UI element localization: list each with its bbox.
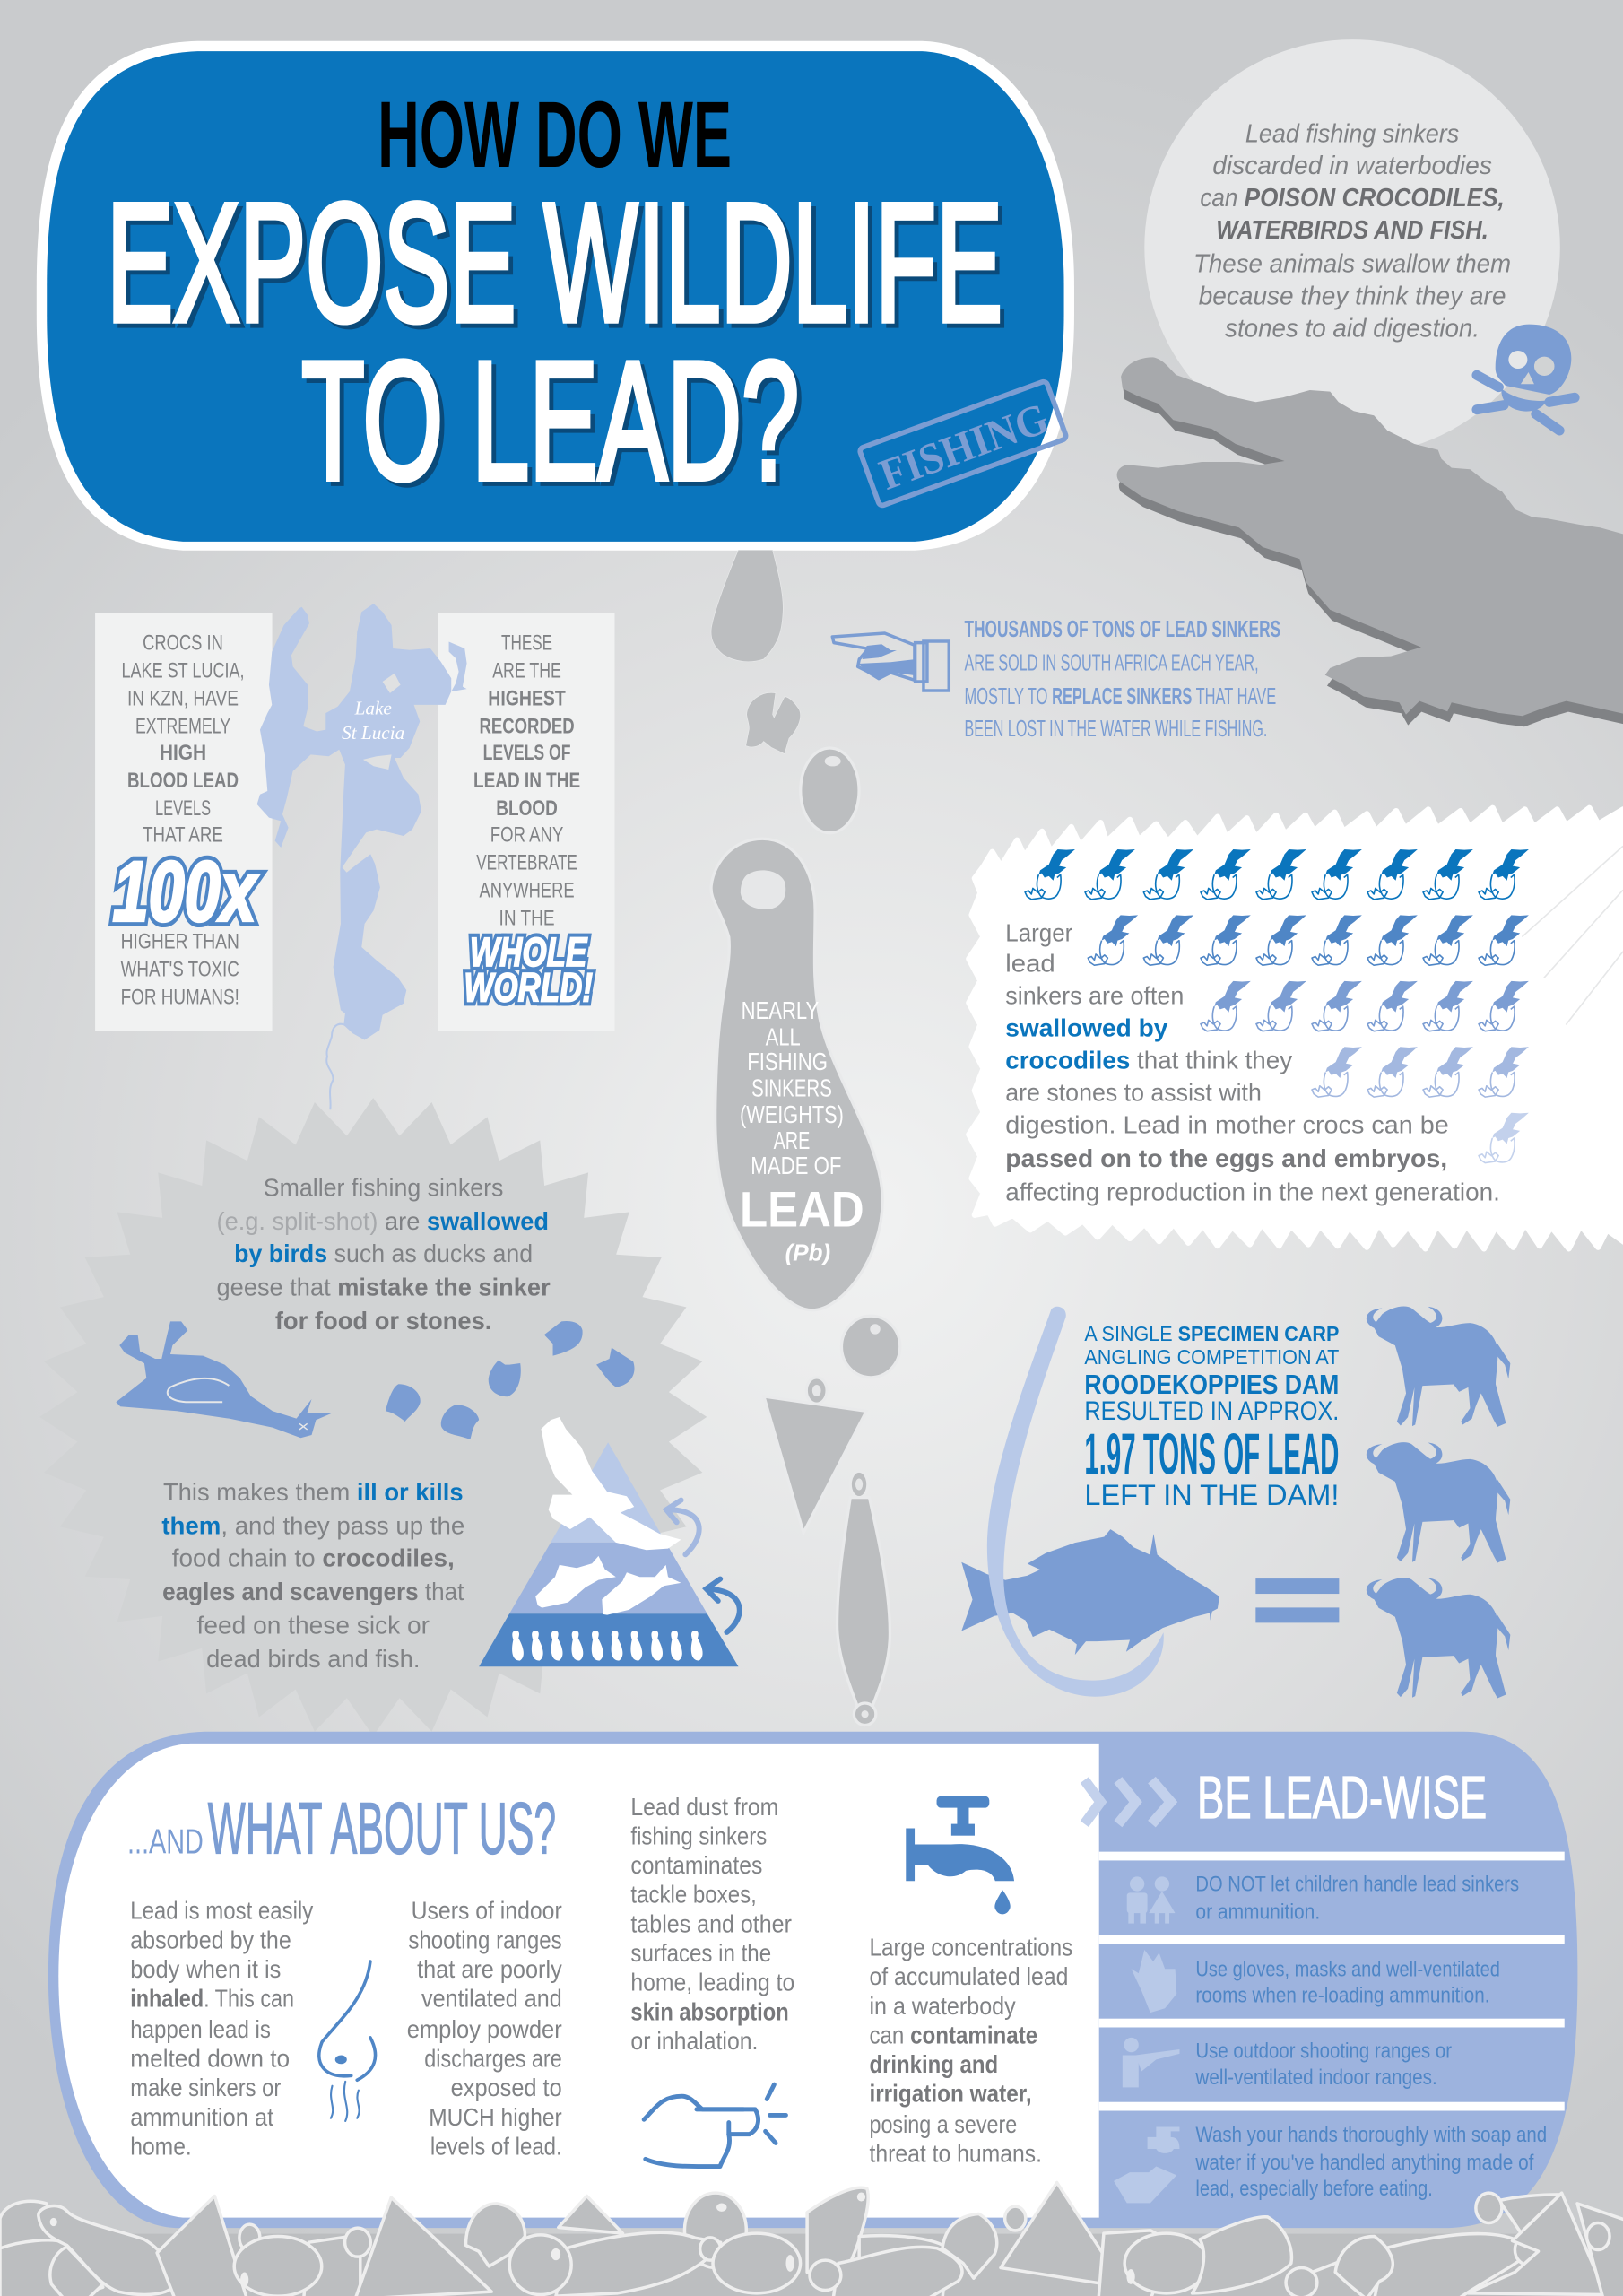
text: ill or kills: eagles and scavengers that — [162, 1578, 464, 1605]
intro text: These animals swallow them — [1193, 250, 1511, 279]
tip: gloves — [1132, 1950, 1500, 2013]
icon: dead duck — [116, 1321, 331, 1438]
sinker label: ALL — [766, 1022, 801, 1050]
text: smaller sinkers — [217, 1173, 551, 1335]
panel: highest recorded — [438, 613, 614, 1031]
text: thousands of tons: THOUSANDS OF TONS OF LEAD SINKERS — [965, 615, 1280, 642]
sinker label — [740, 996, 864, 1265]
crocodile text: are stones to assist with — [1005, 1078, 1262, 1106]
text: smaller sinkers: Smaller fishing sinkers — [264, 1173, 503, 1201]
sinker: ball — [841, 1316, 900, 1378]
text lines right: ARE THE — [492, 660, 561, 683]
100x: 100x — [113, 845, 258, 940]
white area — [58, 1744, 1099, 2218]
column: shooting ranges: shooting ranges — [408, 1926, 562, 1953]
icon: children — [1127, 1876, 1176, 1924]
icon: pointing hand — [832, 633, 949, 691]
column: inhaled: body when it is — [130, 1955, 281, 1983]
panel: crocs blood lead — [95, 613, 273, 1031]
column: inhaled: make sinkers or — [130, 2074, 281, 2101]
whole world — [464, 929, 593, 1010]
text lines left: FOR HUMANS! — [121, 987, 239, 1010]
column: water: drinking and — [869, 2050, 998, 2078]
intro text: WATERBIRDS AND FISH. — [1216, 216, 1488, 245]
crocodile text: crocodiles that think they — [1005, 1046, 1292, 1074]
column: lead dust: surfaces in the — [630, 1939, 771, 1967]
text: ill or kills: This makes them ill or kills — [163, 1478, 464, 1506]
panel: starburst birds — [39, 1098, 707, 1736]
intro text — [1193, 119, 1511, 343]
column: water: Large concentrations — [869, 1934, 1072, 1961]
heading: to lead: TO LEAD? — [306, 331, 803, 519]
text: smaller sinkers: for food or stones. — [275, 1307, 491, 1335]
sinker: long — [838, 1471, 890, 1725]
heading: to lead: TO LEAD? — [301, 326, 799, 515]
whole world: WORLD! — [464, 964, 593, 1010]
whole world: WORLD! — [464, 964, 593, 1010]
intro text: discarded in waterbodies — [1212, 152, 1492, 180]
text lines right: THESE — [501, 632, 552, 656]
panel: and what about us — [48, 1732, 1577, 2228]
crocodile text: affecting reproduction in the next generation. — [1005, 1178, 1500, 1205]
column: shooting ranges — [407, 1897, 562, 2160]
column: lead dust: skin absorption — [630, 1997, 789, 2025]
sinker: oval — [801, 748, 859, 833]
tip: outdoor: Use outdoor shooting ranges or — [1195, 2040, 1452, 2064]
icon: skull and crossbones — [1477, 325, 1575, 430]
text lines left: HIGH — [160, 742, 206, 765]
100x: 100x — [113, 845, 258, 940]
column: water: threat to humans. — [869, 2140, 1042, 2168]
text lines right: BLOOD — [496, 797, 558, 821]
pile base — [0, 2234, 1623, 2296]
carp text: A SINGLE SPECIMEN CARP — [1084, 1322, 1339, 1345]
column: inhaled: melted down to — [130, 2045, 290, 2073]
tip: gloves: Use gloves, masks and well-ventilated — [1195, 1958, 1500, 1981]
text lines right — [473, 632, 580, 931]
text lines right: LEAD IN THE — [473, 770, 580, 793]
column: shooting ranges: Users of indoor — [412, 1897, 562, 1925]
column: inhaled: absorbed by the — [130, 1926, 291, 1953]
text lines left: LEVELS — [155, 797, 211, 821]
column: inhaled — [130, 1897, 313, 2160]
column: lead dust: home, leading to — [630, 1969, 794, 1996]
column: lead dust: fishing sinkers — [630, 1822, 767, 1849]
sinker label: ARE — [774, 1126, 810, 1154]
heading: expose wildlife — [107, 168, 1007, 361]
text lines right: LEVELS OF — [483, 742, 571, 765]
sinker: split shot — [746, 692, 801, 754]
text lines left: THAT ARE — [143, 823, 223, 847]
buffalo — [1367, 1306, 1510, 1698]
column: inhaled: ammunition at — [130, 2103, 273, 2131]
sinker label: SINKERS — [751, 1074, 832, 1101]
column: lead dust: Lead dust from — [630, 1793, 778, 1821]
crocodile text: sinkers are often — [1005, 982, 1184, 1010]
column: shooting ranges: exposed to — [451, 2074, 562, 2101]
food chain pyramid — [479, 1417, 740, 1666]
sinker label: (WEIGHTS) — [740, 1100, 844, 1128]
tip: wash: lead, especially before eating. — [1195, 2178, 1433, 2201]
tip: children — [1127, 1874, 1519, 1925]
column: water — [869, 1934, 1072, 2168]
icon: tap and hand — [1114, 2126, 1179, 2203]
tip: wash: water if you've handled anything made of — [1195, 2152, 1534, 2175]
column: shooting ranges: ventilated and — [421, 1985, 562, 2013]
sinker label: MADE OF — [751, 1152, 841, 1179]
heading: expose wildlife: EXPOSE WILDLIFE — [111, 172, 1007, 361]
carp text: LEFT IN THE DAM! — [1084, 1478, 1339, 1511]
icon: tap — [906, 1796, 1014, 1914]
text lines left: EXTREMELY — [135, 716, 230, 739]
sinker label: LEAD — [740, 1182, 864, 1238]
text: ill or kills: dead birds and fish. — [206, 1645, 420, 1673]
icon: gloves — [1132, 1950, 1176, 2013]
column: lead dust: contaminates — [630, 1851, 762, 1879]
heading — [127, 1787, 556, 1869]
heading: ...AND — [127, 1822, 204, 1861]
carp text: ROODEKOPPIES DAM — [1084, 1369, 1339, 1400]
chevrons — [1084, 1780, 1171, 1824]
crocodile text: swallowed by — [1005, 1014, 1168, 1042]
sinker: triangle — [764, 1378, 866, 1533]
sinker label: (Pb) — [785, 1239, 830, 1265]
text lines right: IN THE — [499, 908, 555, 931]
icon: scattered sinkers — [386, 1321, 634, 1439]
text lines left: IN KZN, HAVE — [127, 688, 239, 711]
text lines right: RECORDED — [480, 716, 575, 739]
column: shooting ranges: levels of lead. — [430, 2132, 562, 2160]
text lines left: WHAT'S TOXIC — [121, 959, 239, 982]
column: water: irrigation water, — [869, 2080, 1032, 2108]
stamp: fishing: FISHING — [873, 393, 1055, 500]
carp text: RESULTED IN APPROX. — [1084, 1396, 1339, 1426]
arrows — [666, 1500, 740, 1632]
tip: gloves: rooms when re-loading ammunition. — [1195, 1985, 1489, 2008]
title panel shape — [37, 41, 1074, 551]
text lines left: HIGHER THAN — [121, 931, 239, 954]
fishing hook — [987, 1307, 1164, 1697]
lake label — [342, 697, 404, 744]
fish — [535, 1556, 681, 1615]
panel: carp competition — [961, 1306, 1510, 1698]
text lines right: ANYWHERE — [480, 880, 575, 903]
text lines left: CROCS IN — [143, 632, 223, 656]
text: ill or kills — [161, 1478, 464, 1673]
icon: shooter — [1123, 2038, 1179, 2087]
column: lead dust: or inhalation. — [630, 2027, 758, 2055]
column: shooting ranges: employ powder — [407, 2015, 562, 2043]
text: thousands of tons: MOSTLY TO REPLACE SINKERS THAT HAVE — [965, 683, 1276, 709]
whole world: WHOLE — [470, 929, 588, 975]
text: smaller sinkers: by birds such as ducks and — [234, 1239, 533, 1267]
column: inhaled: Lead is most easily — [130, 1897, 313, 1925]
crocodile text: digestion. Lead in mother crocs can be — [1005, 1110, 1449, 1138]
text: thousands of tons — [965, 615, 1280, 742]
panel: be lead-wise — [1084, 1764, 1565, 2203]
column: water: can contaminate — [869, 2021, 1037, 2048]
panel: title — [37, 41, 1074, 551]
carp text — [1084, 1322, 1339, 1511]
intro text: can POISON CROCODILES, — [1200, 184, 1505, 213]
icon: nose — [319, 1961, 376, 2121]
text lines right: VERTEBRATE — [476, 851, 577, 874]
text: smaller sinkers: geese that mistake the sinker — [217, 1273, 551, 1300]
crocodile text: lead — [1005, 950, 1055, 978]
heading: how do we: HOW DO WE — [378, 83, 732, 187]
column: water: of accumulated lead — [869, 1962, 1068, 1990]
text lines right: HIGHEST — [488, 688, 566, 711]
column: lead dust — [630, 1793, 794, 2055]
heading: WHAT ABOUT US? — [208, 1787, 556, 1869]
map: lake st lucia — [257, 604, 467, 1109]
tip: children: or ammunition. — [1195, 1901, 1320, 1925]
text: ill or kills: them, and they pass up the — [161, 1511, 464, 1539]
crocodile text: passed on to the eggs and embryos, — [1005, 1144, 1447, 1172]
icon: pointing finger — [644, 2084, 785, 2167]
lake label: Lake — [354, 697, 392, 718]
whole world: WHOLE — [470, 929, 588, 975]
sinker: drop — [711, 550, 783, 662]
tip: children: DO NOT let children handle lead sinkers — [1195, 1874, 1519, 1897]
column: inhaled: inhaled. This can — [130, 1985, 294, 2013]
text: thousands of tons: ARE SOLD IN SOUTH AFRICA EACH YEAR, — [965, 649, 1259, 676]
tip: outdoor — [1123, 2038, 1452, 2090]
carp text: ANGLING COMPETITION AT — [1084, 1345, 1339, 1369]
tip: wash: Wash your hands thoroughly with soap and — [1195, 2124, 1547, 2147]
text lines right: FOR ANY — [490, 823, 564, 847]
pile of sinkers — [0, 2183, 1623, 2296]
text: thousands of tons: BEEN LOST IN THE WATER WHILE FISHING. — [965, 715, 1267, 742]
text: ill or kills: feed on these sick or — [197, 1611, 430, 1639]
small sinkers row — [512, 1631, 703, 1661]
lake label: St Lucia — [342, 722, 404, 744]
column: shooting ranges: MUCH higher — [429, 2103, 562, 2131]
divider bars — [1099, 1852, 1565, 2111]
column: shooting ranges: discharges are — [424, 2045, 562, 2073]
sinker: large with label — [711, 839, 882, 1310]
text: smaller sinkers: (e.g. split-shot) are swallowed — [217, 1207, 549, 1235]
intro text: Lead fishing sinkers — [1245, 119, 1459, 148]
column: water: posing a severe — [869, 2110, 1017, 2138]
heading: BE LEAD-WISE — [1197, 1764, 1487, 1831]
crocodile text: Larger — [1005, 918, 1072, 946]
intro text: because they think they are — [1199, 283, 1506, 311]
tip: wash — [1114, 2124, 1547, 2203]
sinker label: FISHING — [747, 1048, 828, 1075]
heading: expose wildlife: EXPOSE WILDLIFE — [107, 168, 1002, 356]
column: inhaled: home. — [130, 2132, 192, 2160]
panel: intro circle — [1144, 39, 1560, 456]
text lines left — [121, 632, 245, 1010]
crocodile text — [1005, 918, 1500, 1205]
hatchlings — [1025, 849, 1529, 1163]
column: lead dust: tackle boxes, — [630, 1881, 757, 1909]
heading: to lead — [301, 326, 803, 519]
column: lead dust: tables and other — [630, 1909, 792, 1937]
text lines left: BLOOD LEAD — [127, 770, 239, 793]
equals sign — [1255, 1578, 1339, 1622]
column: shooting ranges: that are poorly — [417, 1955, 562, 1983]
column: water: in a waterbody — [869, 1992, 1016, 2020]
crocodile silhouette — [1117, 357, 1623, 726]
text: ill or kills: food chain to crocodiles, — [172, 1544, 455, 1571]
carp — [961, 1529, 1219, 1655]
eagle — [541, 1417, 681, 1550]
pile right half — [807, 2183, 1623, 2296]
pile left half — [0, 2193, 801, 2296]
text lines left: LAKE ST LUCIA, — [121, 660, 245, 683]
tip: outdoor: well-ventilated indoor ranges. — [1195, 2066, 1437, 2090]
intro text: stones to aid digestion. — [1225, 314, 1480, 343]
sinker label: NEARLY — [742, 996, 819, 1024]
column: inhaled: happen lead is — [130, 2015, 271, 2043]
panel: crocodile eggs — [968, 808, 1623, 1248]
